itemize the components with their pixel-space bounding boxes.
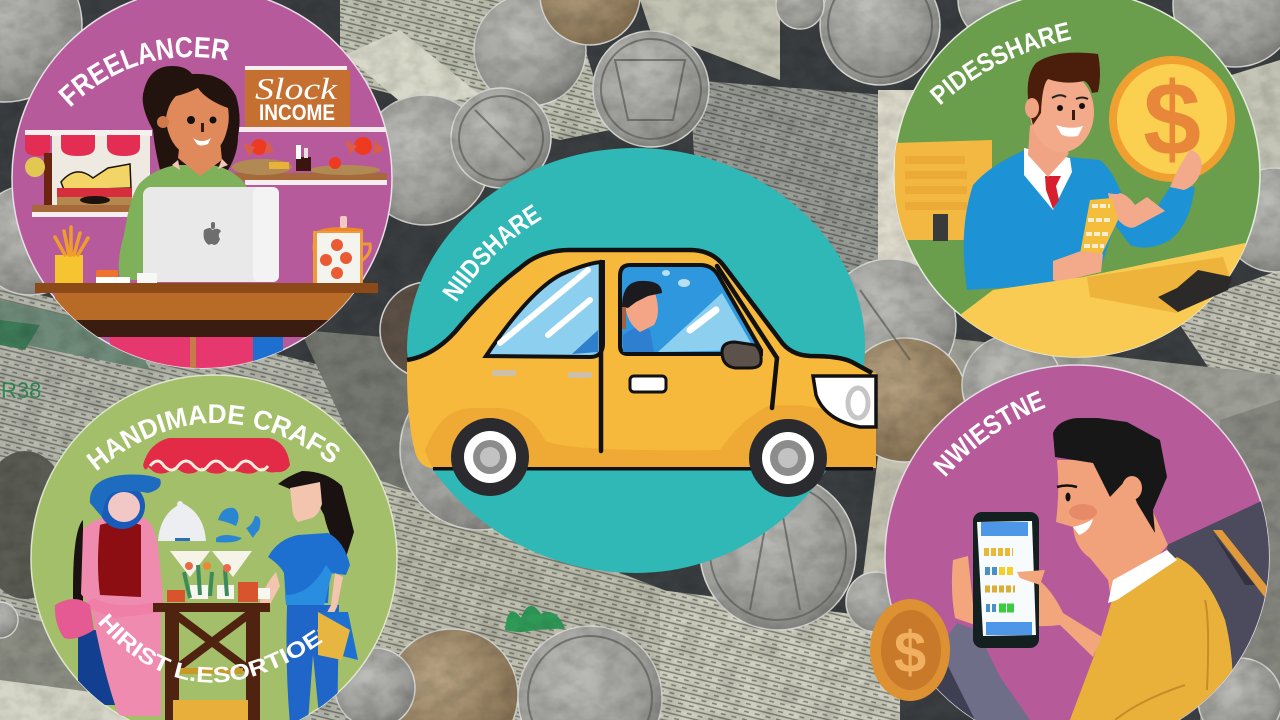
title: freelancer: FREELANCER (58, 37, 229, 107)
stapler (1158, 270, 1232, 312)
man with smile (1053, 418, 1168, 605)
yellow sweater (1060, 550, 1233, 720)
front wheel (749, 419, 827, 497)
right shelf with craft items (232, 127, 387, 185)
bronze dollar coin (870, 599, 950, 701)
jar with red dots (313, 216, 370, 283)
driver (623, 327, 654, 352)
hands and calculator (1053, 150, 1202, 282)
yellow car (407, 250, 876, 497)
front window with driver (620, 265, 761, 354)
bronze dollar coin: $ (894, 620, 926, 685)
man (964, 53, 1195, 290)
caption: lower curved text: HIRIST L.ESORTIOE (98, 613, 323, 683)
side mirror (722, 342, 761, 368)
panel: investing on phone (870, 364, 1270, 720)
door handle (630, 376, 666, 392)
green serial number: R38 (1, 378, 41, 403)
rear window (486, 262, 603, 357)
title: investing: NWIESTNE (932, 390, 1046, 477)
green bill seal (505, 606, 565, 632)
yellow counter (960, 243, 1246, 357)
headlight (813, 376, 876, 427)
desk items (96, 270, 130, 283)
coin reliefs (459, 0, 932, 720)
title: ridesharing: PIDESSHARE (929, 22, 1072, 105)
building (895, 140, 992, 241)
smartphone (973, 512, 1045, 648)
sign: income: INCOME (259, 100, 335, 125)
table with crafts (153, 551, 270, 720)
rear wheel (451, 418, 529, 496)
desk (35, 283, 378, 377)
lower body shading (425, 405, 876, 468)
market awning (143, 438, 290, 474)
gold coin (1109, 56, 1235, 182)
white dome and blue crafts (158, 501, 260, 542)
panel: ridesharing and coin (893, 0, 1261, 358)
hand and arm (952, 556, 1102, 657)
right woman (258, 471, 358, 720)
dark backdrop with strap (1167, 501, 1269, 720)
left woman (55, 474, 164, 716)
gold coin: $ (1143, 62, 1201, 178)
grey sleeve (936, 623, 1030, 720)
sign: income: Slock (255, 71, 339, 106)
sign: income (245, 66, 350, 127)
panel: rideshare car (406, 148, 878, 573)
panel: handmade crafts (30, 374, 398, 720)
stall and shelves (25, 127, 387, 217)
pen cup (55, 227, 88, 283)
woman at laptop (119, 66, 279, 283)
title: handmade crafts: HANDIMADE CRAFS (86, 404, 340, 471)
title: rideshare: NIIDSHARE (442, 204, 542, 302)
door lines (601, 262, 777, 451)
panel: freelancer (11, 0, 393, 369)
market stall (25, 130, 152, 217)
